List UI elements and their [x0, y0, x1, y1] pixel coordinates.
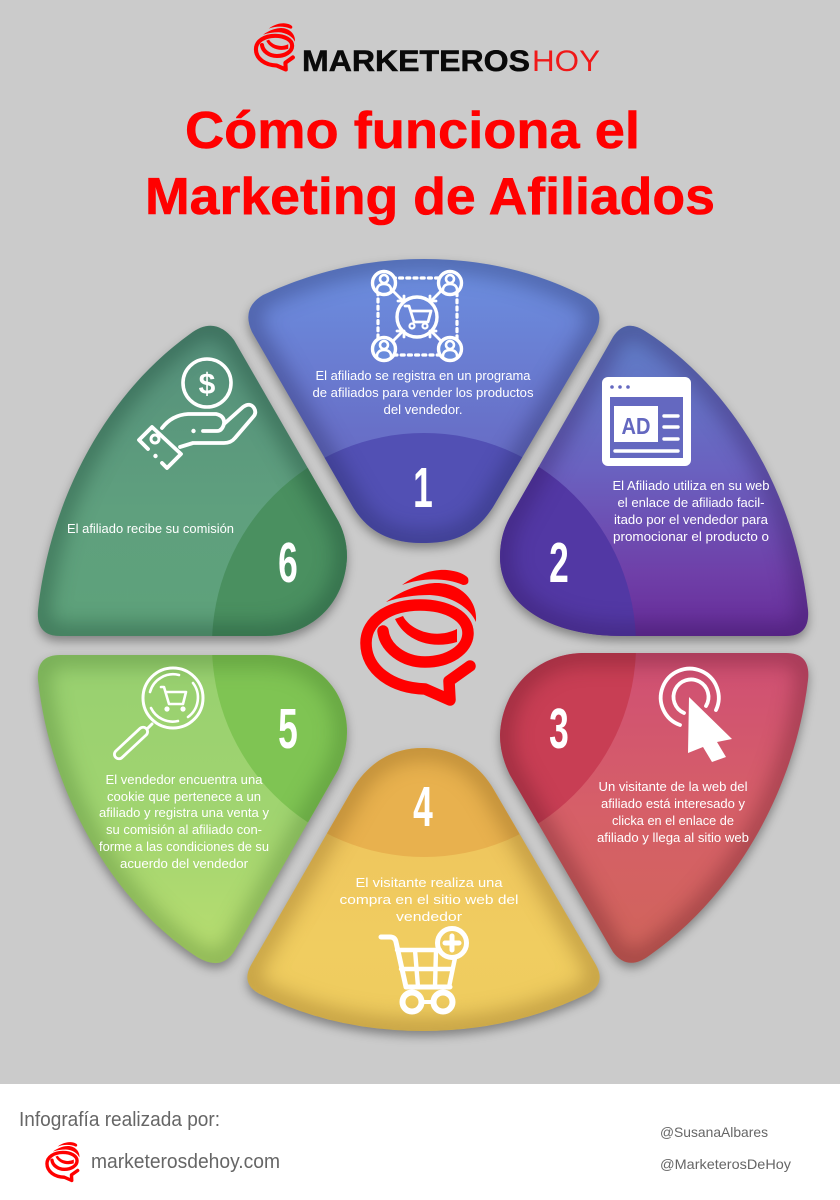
icon: affiliate network with cart [372, 272, 462, 360]
footer [0, 1084, 840, 1200]
text: step 2: promocionar el producto o [613, 529, 769, 544]
text: step 4: compra en el sitio web del [340, 892, 519, 907]
number 2: 2 [549, 532, 569, 595]
footer logo [47, 1142, 79, 1180]
number 6: 6 [278, 532, 298, 595]
text: step 2: el enlace de afiliado facil- [618, 495, 764, 510]
icon: click cursor [661, 669, 732, 762]
text: step 5: El vendedor encuentra una [106, 772, 263, 787]
text: step 5: afiliado y registra una venta y [99, 805, 269, 820]
number 3: 3 [549, 698, 569, 761]
text: step 4: El visitante realiza una [356, 875, 503, 890]
text: step 4: vendedor [396, 909, 463, 924]
header logo [256, 23, 600, 78]
text: step 6: El afiliado recibe su comisión [67, 521, 234, 536]
number 4: 4 [413, 776, 433, 839]
title: Marketing de Afiliados [145, 168, 715, 226]
text: step 3: afiliado y llega al sitio web [597, 830, 749, 845]
text: step 5: su comisión al afiliado con- [106, 822, 262, 837]
number 5: 5 [278, 698, 298, 761]
text: step 1: del vendedor. [384, 402, 462, 417]
title: Cómo funciona el [185, 102, 640, 160]
icon: hand holding coin: $ [199, 368, 216, 401]
icon: shopping cart with plus [381, 928, 466, 1012]
text: step 1: El afiliado se registra en un programa [316, 368, 531, 383]
text: step 3 [597, 779, 749, 845]
brand name suffix: HOY [532, 45, 600, 78]
text: step 5: acuerdo del vendedor [120, 856, 249, 871]
text: step 5: cookie que pertenece a un [107, 789, 261, 804]
website: marketerosdehoy.com [91, 1151, 280, 1173]
icon: web advertisement window [602, 377, 691, 466]
number 1: 1 [413, 457, 433, 520]
text: step 5: forme a las condiciones de su [99, 839, 269, 854]
footer credit: Infografía realizada por: [19, 1109, 220, 1131]
central logo [366, 570, 476, 700]
text: step 1: de afiliados para vender los productos [312, 385, 534, 400]
title [145, 102, 715, 226]
text: step 2: itado por el vendedor para [614, 512, 769, 527]
icon: magnifier with cart [113, 668, 203, 761]
text: step 3: clicka en el enlace de [612, 813, 734, 828]
panel: step 5 [32, 654, 352, 974]
text: step 2: El Afiliado utiliza en su web [612, 478, 770, 493]
text: step 1 [312, 368, 534, 417]
panel: step 4 [242, 748, 605, 1042]
logo mark [256, 23, 295, 70]
panel: step 6 [32, 326, 352, 647]
panel: step 3 [494, 652, 814, 973]
handle: Marketeros: @MarketerosDeHoy [660, 1156, 791, 1172]
text: step 4 [340, 875, 519, 924]
text: step 5 [99, 772, 269, 871]
text: step 3: Un visitante de la web del [598, 779, 748, 794]
text: step 2 [612, 478, 770, 544]
panel: step 2 [494, 326, 814, 647]
panel: step 1 [243, 258, 604, 554]
brand name: MARKETEROS [302, 45, 530, 78]
text: step 3: afiliado está interesado y [601, 796, 746, 811]
icon: web advertisement window: AD [622, 413, 650, 439]
handle: Susana: @SusanaAlbares [660, 1124, 768, 1140]
icon: hand holding coin [139, 359, 255, 468]
